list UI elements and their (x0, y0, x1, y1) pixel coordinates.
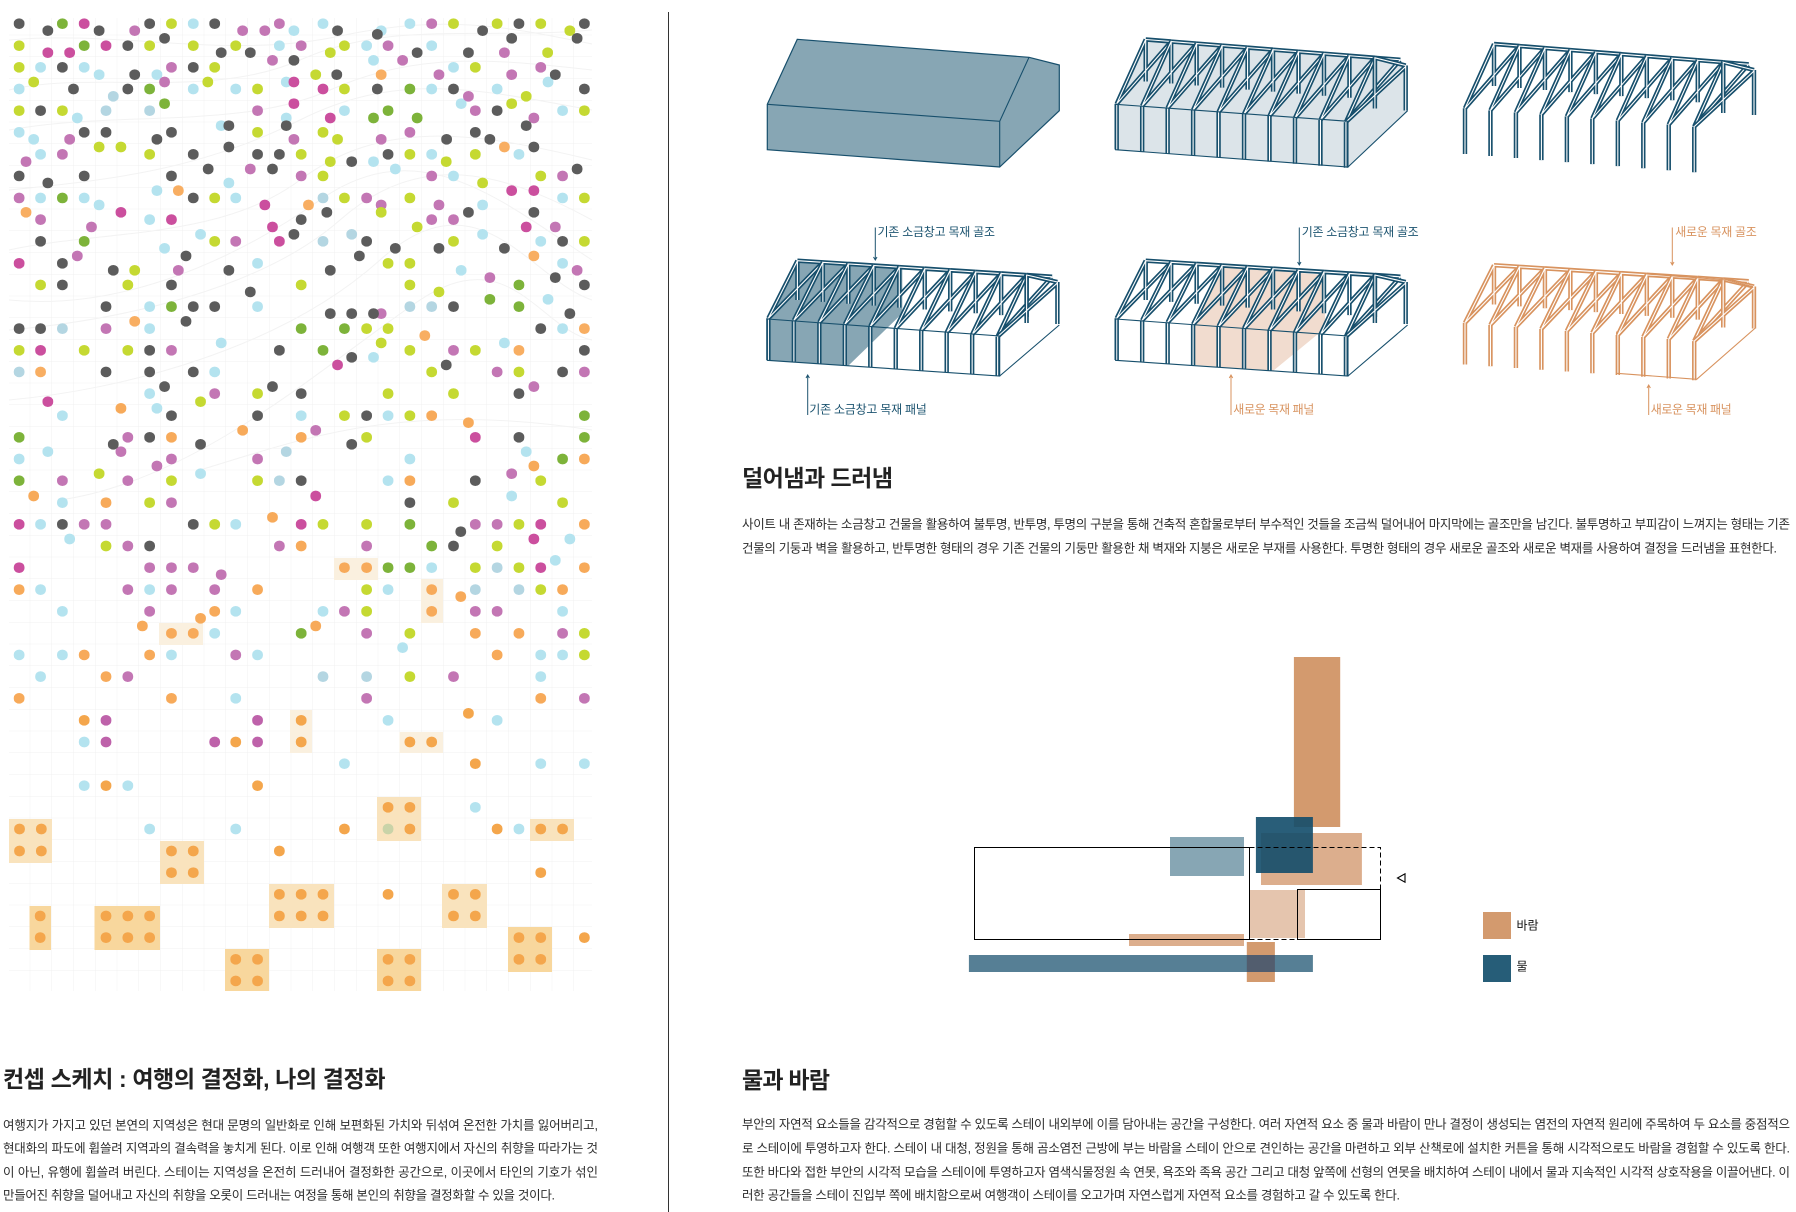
text block: removing and revealing: 건물의 기둥과 벽을 활용하고, 반투명한 형태의 경우 기존 건물의 기둥만 활용한 채 벽재와 지붕은 새로운 부재를 사용한다. 투명한 형태의 경우 새로운 골조와 새로운 벽재를 사용하여 결정을 드러냄을 표현한다. (742, 542, 1777, 556)
text block: water and wind: 부안의 자연적 요소들을 감각적으로 경험할 수 있도록 스테이 내외부에 이를 담아내는 공간을 구성한다. 여러 자연적 요소 중 물과 바람이 만나 결정이 생성되는 염전의 자연적 원리에 주목하여 두 요소를 중점적으 (742, 1118, 1790, 1132)
text block: concept sketch: 만들어진 취향을 덜어내고 자신의 취향을 오롯이 드러내는 여정을 통해 본인의 취향을 결정화할 수 있을 것이다. (3, 1188, 555, 1202)
callout: new panel label middle: 새로운 목재 패널 (1233, 402, 1314, 416)
text block: water and wind: 또한 바다와 접한 부안의 시각적 모습을 스테이에 투영하고자 염색식물정원 속 연못, 욕조와 족욕 공간 그리고 대청 앞쪽에 선형의 연못을 배치하여 스테이 내에서 물과 지속적인 시각적 상호작용을 이끌어낸다. 이 (742, 1166, 1790, 1180)
diagram: new orange frame (1465, 265, 1755, 380)
heading: removing and revealing: 덜어냄과 드러냄 (742, 465, 893, 491)
text block: concept sketch (3, 1118, 598, 1202)
diagram: solid salt warehouse block (767, 39, 1059, 167)
text block: concept sketch: 여행지가 가지고 있던 본연의 지역성은 현대 문명의 일반화로 인해 보편화된 가치와 뒤섞여 온전한 가치를 잃어버리고, (3, 1118, 598, 1132)
text block: water and wind: 러한 공간들을 스테이 진입부 쪽에 배치함으로써 여행객이 스테이를 오고가며 자연스럽게 자연적 요소를 경험하고 갈 수 있도록 한다. (742, 1188, 1400, 1202)
icon: entry marker (1398, 874, 1405, 882)
callout: existing frame label left: 기존 소금창고 목재 골조 (878, 225, 995, 239)
panel: concept sketch dot grid (9, 18, 592, 991)
text block: concept sketch: 현대화의 파도에 휩쓸려 지역과의 결속력을 놓치게 된다. 이로 인해 여행객 또한 여행지에서 자신의 취향을 따라가는 것 (3, 1140, 598, 1156)
callout: new panel label right (1647, 385, 1732, 416)
dots: lower section (20, 713, 584, 982)
heading: concept sketch: 컨셉 스케치 : 여행의 결정화, 나의 결정화 (3, 1066, 386, 1092)
text block: removing and revealing: 사이트 내 존재하는 소금창고 건물을 활용하여 불투명, 반투명, 투명의 구분을 통해 건축적 혼합물로부터 부수적인 것들을 조금씩 덜어내어 마지막에는 골조만을 남긴다. 불투명하고 부피감이 느껴지는 형태는 기존 (742, 518, 1790, 532)
plan: building outlines (974, 848, 1380, 940)
legend: wind (1483, 912, 1538, 939)
vertical divider (668, 12, 670, 1212)
callout: existing panel label (806, 375, 927, 416)
plan: water zones (969, 817, 1313, 972)
diagram: new panel with existing frame (1116, 261, 1408, 376)
callout: new frame label right: 새로운 목재 골조 (1675, 225, 1757, 239)
legend: wind: 바람 (1516, 918, 1538, 932)
highlight blocks (9, 558, 574, 991)
callout: existing frame label left (874, 225, 995, 260)
callout: existing frame label middle: 기존 소금창고 목재 골조 (1302, 225, 1419, 239)
legend: water (1483, 955, 1528, 982)
diagram: existing panel and frame detail (767, 261, 1059, 376)
diagram: water and wind plan (969, 657, 1405, 982)
text block: removing and revealing (742, 518, 1790, 556)
callout: new panel label middle (1229, 375, 1314, 416)
legend: water: 물 (1516, 960, 1528, 974)
callout: existing frame label middle (1298, 225, 1419, 265)
heading: water and wind: 물과 바람 (742, 1067, 830, 1093)
text block: water and wind (742, 1118, 1790, 1202)
diagram: translucent building with frame (1116, 39, 1408, 168)
callout: existing panel label: 기존 소금창고 목재 패널 (809, 402, 927, 416)
diagram: bare navy frame (1465, 44, 1754, 172)
text block: water and wind: 로 스테이에 투영하고자 한다. 스테이 내 대청, 정원을 통해 곰소염전 근방에 부는 바람을 스테이 안으로 견인하는 공간을 마련하고 외부 산책로에 설치한 커튼을 통해 시각적으로도 바람을 경험할 수 있도록 한다. (742, 1140, 1790, 1156)
dots: middle section (19, 401, 584, 699)
callout: new frame label right (1671, 225, 1757, 265)
plan: wind zones (1129, 657, 1362, 982)
callout: new panel label right: 새로운 목재 패널 (1651, 402, 1732, 416)
text block: concept sketch: 이 아닌, 유행에 휩쓸려 버린다. 스테이는 지역성을 온전히 드러내어 결정화한 공간으로, 이곳에서 타인의 기호가 섞인 (3, 1164, 598, 1180)
dots: upper section (19, 23, 584, 394)
